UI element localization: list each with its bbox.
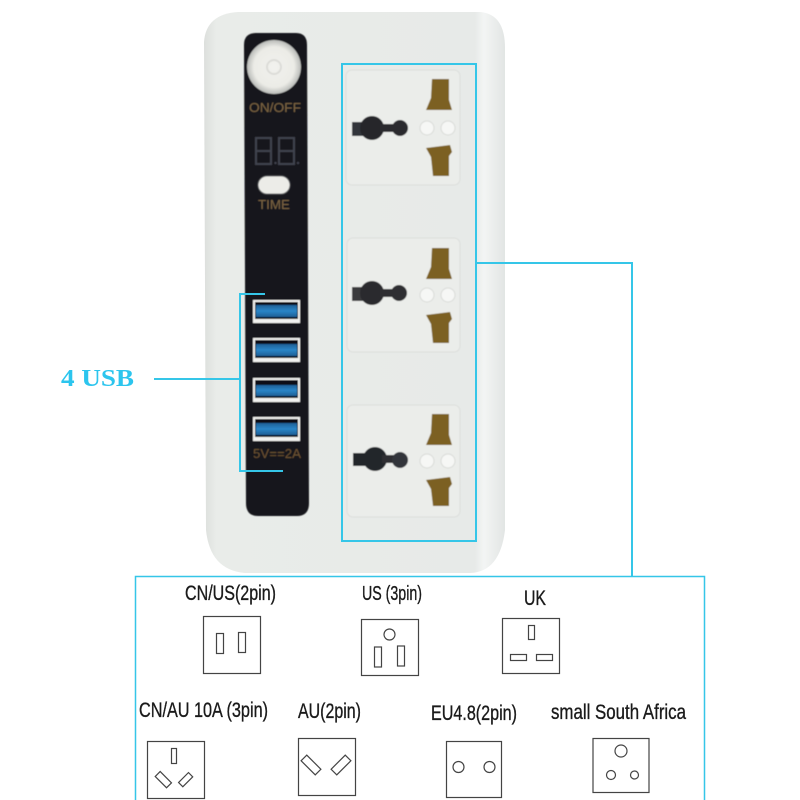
connector line to plug types: [476, 263, 632, 576]
usb rating label: 5V==2A: [253, 446, 301, 461]
icon: CN/US 2pin socket: [204, 616, 260, 674]
label: EU 4.8 2pin: EU4.8(2pin): [431, 702, 517, 725]
socket 2: [347, 238, 460, 352]
label: CN/AU 10A 3pin: CN/AU 10A (3pin): [139, 699, 268, 722]
icon: EU socket: [446, 742, 502, 798]
panel frame: [136, 576, 704, 800]
on/off label: ON/OFF: [249, 100, 301, 115]
time button: [258, 176, 290, 194]
time display: [256, 138, 299, 164]
label: UK: UK: [524, 587, 546, 610]
label: US 3pin: US (3pin): [362, 583, 422, 605]
usb port 1: [253, 300, 300, 323]
usb port 2: [253, 338, 300, 362]
usb callout label: 4 USB: [61, 366, 134, 392]
icon: small South Africa socket: [593, 738, 649, 792]
usb port 3: [253, 378, 300, 402]
label: CN/US 2pin: CN/US(2pin): [185, 582, 276, 605]
time label: TIME: [258, 197, 290, 212]
usb bracket and leader line: [154, 294, 283, 471]
label: AU 2pin: AU(2pin): [298, 700, 361, 723]
sockets highlight frame: [342, 64, 476, 541]
plug types panel: [136, 576, 704, 800]
icon: AU 2pin socket: [298, 738, 356, 796]
control panel: [244, 33, 309, 516]
on/off button: [247, 40, 301, 94]
icon: US 3pin socket: [362, 620, 418, 676]
socket 1: [346, 70, 460, 185]
label: small South Africa: small South Africa: [551, 701, 686, 724]
icon: CN/AU 3pin socket: [148, 742, 204, 798]
device body: [204, 12, 505, 573]
socket 3: [347, 405, 460, 517]
power strip device: [204, 12, 505, 573]
icon: UK socket: [502, 618, 560, 674]
usb port 4: [253, 417, 300, 441]
black panel strip: [244, 33, 309, 516]
